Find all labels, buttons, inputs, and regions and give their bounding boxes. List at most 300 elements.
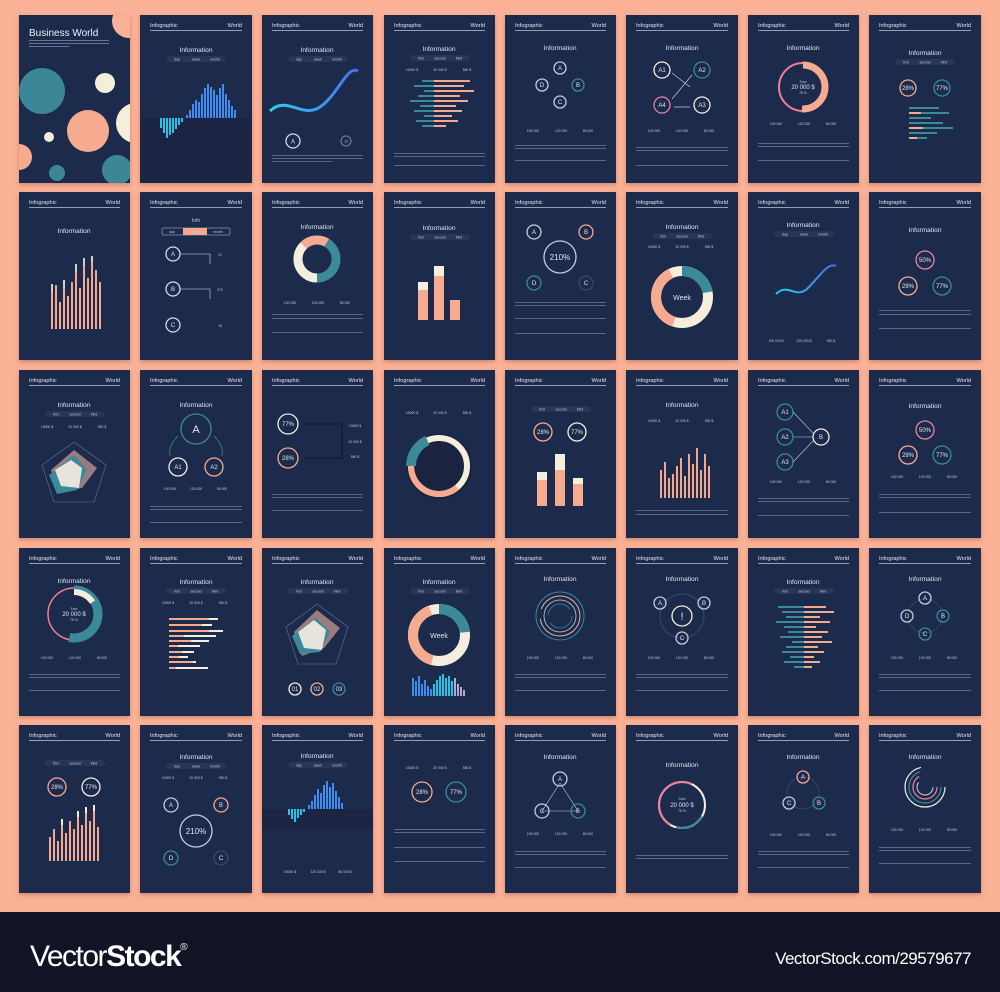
card r5c6: ring 20 000 $ [626, 725, 738, 893]
card r3c1: radar chart: World [105, 378, 120, 384]
card r4c2: horizontal pink bars: second [191, 590, 202, 594]
card r5c4: 28% 77%: 550 $ [463, 766, 471, 770]
card r2c3: cream/teal donut: 120 000 [312, 301, 324, 305]
card r3c8: 50% 28% 77%: 50% [919, 428, 932, 434]
card r1c6: A1 A2 A3 A4: A4 [658, 103, 666, 109]
card r2c6: Week donut: Infographic [636, 200, 664, 206]
card r4c8: A B C D cycle: D [905, 614, 910, 620]
card r4c6: ! with A B C: ! [680, 611, 684, 623]
card r2c5: 210% network: Infographic [515, 200, 543, 206]
card r3c1: radar chart: 550 $ [98, 425, 106, 429]
card r3c3: 77% 28% with values: 77% [282, 422, 295, 428]
card r1c8: 28% 77% with bars: third [941, 60, 947, 64]
card r1c3: wave line: month [332, 58, 342, 62]
card r4c6: ! with A B C: Information [666, 576, 699, 583]
card r2c4: three stacked bars [384, 192, 495, 360]
card r2c2: A B C timeline: C [171, 323, 176, 329]
card r4c1: donut 20 000 $: 80 000 [97, 656, 107, 660]
card r2c6: Week donut: 550 $ [705, 245, 713, 249]
card r2c6: Week donut: third [698, 234, 704, 238]
card r4c2: horizontal pink bars: 10000 $ [162, 601, 174, 605]
card r2c2: A B C timeline: week [191, 230, 199, 234]
card r4c1: donut 20 000 $: Information [58, 578, 91, 585]
card r3c1: radar chart: Information [58, 402, 91, 409]
card r1c2: bar chart positive/negative: month [210, 58, 220, 62]
card r2c7: wave line: 550 $ [827, 339, 835, 343]
card r3c2: A with A1 A2: World [227, 378, 242, 384]
card r3c2: A with A1 A2: A2 [210, 465, 218, 471]
card r2c3: cream/teal donut [262, 192, 373, 360]
card r1c2: bar chart positive/negative: Information [180, 47, 213, 54]
card r1c2: bar chart positive/negative [140, 15, 252, 183]
card r2c7: wave line: Infographic [758, 200, 786, 206]
card r1c5: A B C D nodes: 120 000 [555, 129, 567, 133]
card r2c3: cream/teal donut: 100 000 [284, 301, 296, 305]
card r5c5: triangle A B C [505, 725, 616, 893]
card r4c2: horizontal pink bars: third [212, 590, 218, 594]
card r5c4: 28% 77%: 20 000 $ [433, 766, 447, 770]
card r4c5: concentric circles: World [591, 556, 606, 562]
card r4c2: horizontal pink bars: Infographic [150, 556, 178, 562]
card r3c7: A1 A2 A3 to B: World [834, 378, 849, 384]
card r4c8: A B C D cycle: Information [908, 576, 942, 583]
card r4c4: Week donut with bars: second [435, 590, 446, 594]
card r4c5: concentric circles: Information [544, 576, 577, 583]
card r3c8: 50% 28% 77% [869, 370, 981, 538]
card r2c6: Week donut: Information [666, 224, 699, 231]
card r4c6: ! with A B C: 100 000 [648, 656, 660, 660]
card r4c6: ! with A B C: C [680, 636, 685, 642]
card r5c6: ring 20 000 $: Infographic [636, 733, 664, 739]
card r4c5: concentric circles: Infographic [515, 556, 543, 562]
card r1c5: A B C D nodes: 80 000 [583, 129, 593, 133]
card r5c6: ring 20 000 $: Sum [679, 797, 686, 801]
card r5c8: concentric rings: World [956, 733, 971, 739]
card r1c6: A1 A2 A3 A4 [626, 15, 738, 183]
card r3c2: A with A1 A2: A [192, 424, 200, 436]
card r2c2: A B C timeline: B [171, 287, 175, 293]
card r4c4: Week donut with bars: first [418, 590, 424, 594]
card r5c5: triangle A B C: 120 000 [555, 832, 567, 836]
card r2c5: 210% network: C [584, 281, 589, 287]
card r5c5: triangle A B C: C [540, 809, 545, 815]
card r3c3: 77% 28% with values: Infographic [272, 378, 300, 384]
card r4c6: ! with A B C: A [658, 601, 662, 607]
card r4c3: radar with 01 02 03: first [296, 590, 302, 594]
card r1c4: horizontal bars: World [470, 23, 485, 29]
card r4c5: concentric circles: 80 000 [583, 656, 593, 660]
card r3c4: big ring: 20 000 $ [433, 411, 447, 415]
card r1c4: horizontal bars [384, 15, 495, 183]
card r5c1: 28% 77% vertical bars: World [105, 733, 120, 739]
card r1c5: A B C D nodes: 100 000 [527, 129, 539, 133]
card r3c6: vertical bars: 550 $ [705, 419, 713, 423]
card r5c3: pos/neg bars: 120 000 $ [310, 870, 326, 874]
card r1c5: A B C D nodes: World [591, 23, 606, 29]
card r2c8: 50% 28% 77% [869, 192, 981, 360]
footer: VectorStock logo: ® [180, 942, 188, 953]
footer band [0, 912, 1000, 992]
card r5c3: pos/neg bars: month [332, 764, 342, 768]
card r1c2: bar chart positive/negative: week [192, 58, 200, 62]
card r5c7: A B C cycle: Infographic [758, 733, 786, 739]
card r1c4: horizontal bars: second [435, 56, 446, 60]
card r4c1: donut 20 000 $: 20 000 $ [62, 612, 86, 618]
card r4c8: A B C D cycle: 100 000 [891, 656, 903, 660]
card r5c8: concentric rings: Information [908, 754, 942, 761]
card r2c2: A B C timeline: day [169, 230, 175, 234]
card r4c6: ! with A B C: 80 000 [704, 656, 714, 660]
card r3c4: big ring: Infographic [394, 378, 422, 384]
card r2c7: wave line: World [834, 200, 849, 206]
card r3c1: radar chart: second [70, 412, 81, 416]
card r3c6: vertical bars: Information [666, 402, 699, 409]
card r2c4: three stacked bars: World [470, 200, 485, 206]
card r4c8: A B C D cycle: Infographic [879, 556, 907, 562]
card r2c8: 50% 28% 77%: 77% [936, 284, 949, 290]
card r5c8: concentric rings [869, 725, 981, 893]
card r1c5: A B C D nodes: A [558, 66, 562, 72]
card r3c1: radar chart: 20 000 $ [68, 425, 82, 429]
card r4c6: ! with A B C: 120 000 [676, 656, 688, 660]
card r1c8: 28% 77% with bars: 28% [902, 86, 915, 92]
card r5c2: 210% network: 10000 $ [162, 776, 174, 780]
card r3c5: 28% 77% with bars: World [591, 378, 606, 384]
card r4c3: radar with 01 02 03: third [334, 590, 340, 594]
card r5c6: ring 20 000 $: 75 % [678, 809, 686, 813]
card r5c2: 210% network: A [169, 803, 173, 809]
card r2c7: wave line: 100 000 $ [768, 339, 784, 343]
card r3c5: 28% 77% with bars: 28% [537, 430, 550, 436]
card r3c4: big ring: 10000 $ [406, 411, 418, 415]
card r1c3: wave line: 12 [344, 140, 348, 144]
card r5c5: triangle A B C: World [591, 733, 606, 739]
card r1c5: A B C D nodes: B [576, 83, 580, 89]
card r2c5: 210% network: World [591, 200, 606, 206]
card r1c8: 28% 77% with bars: 77% [936, 86, 949, 92]
card r3c7: A1 A2 A3 to B: Infographic [758, 378, 786, 384]
card r1c5: A B C D nodes: Infographic [515, 23, 543, 29]
card r2c7: wave line: week [800, 232, 808, 236]
card r4c3: radar with 01 02 03: Information [300, 579, 334, 586]
card r1c5: A B C D nodes: D [540, 83, 545, 89]
card r5c1: 28% 77% vertical bars: 77% [85, 785, 98, 791]
card r5c7: A B C cycle: Information [786, 754, 820, 761]
card r1c8: 28% 77% with bars: Information [908, 50, 942, 57]
card r3c2: A with A1 A2: A1 [174, 465, 182, 471]
card r3c7: A1 A2 A3 to B: A1 [781, 410, 789, 416]
card r2c2: A B C timeline: 12 [218, 253, 222, 257]
card r4c6: ! with A B C: World [713, 556, 728, 562]
card r4c3: radar with 01 02 03: 03 [336, 687, 343, 693]
card r3c7: A1 A2 A3 to B: A3 [781, 460, 789, 466]
card r4c4: Week donut with bars: World [470, 556, 485, 562]
card r1c6: A1 A2 A3 A4: Infographic [636, 23, 664, 29]
card r1c4: horizontal bars: 550 $ [463, 68, 471, 72]
card r1c6: A1 A2 A3 A4: World [713, 23, 728, 29]
card r1c7: pink donut: World [834, 23, 849, 29]
card r1c6: A1 A2 A3 A4: Information [666, 45, 699, 52]
card r4c8: A B C D cycle: A [923, 596, 927, 602]
card r3c7: A1 A2 A3 to B: 100 000 [770, 480, 782, 484]
card r5c3: pos/neg bars [262, 725, 373, 893]
card r2c8: 50% 28% 77%: Information [908, 227, 942, 234]
card r5c1: 28% 77% vertical bars: second [70, 762, 81, 766]
card r2c4: three stacked bars: first [418, 236, 424, 240]
card r3c6: vertical bars: 20 000 $ [675, 419, 689, 423]
card r5c4: 28% 77%: 28% [416, 790, 429, 796]
card r3c4: big ring: World [470, 378, 485, 384]
card r4c8: A B C D cycle: 80 000 [947, 656, 957, 660]
footer: VectorStock logo: VectorStock [30, 940, 180, 973]
card r3c5: 28% 77% with bars: 77% [571, 430, 584, 436]
card r1c6: A1 A2 A3 A4: 80 000 [704, 129, 714, 133]
card r5c3: pos/neg bars: 80 000 $ [338, 870, 352, 874]
card r4c2: horizontal pink bars: 550 $ [219, 601, 227, 605]
card r2c6: Week donut: first [660, 234, 666, 238]
card r2c1: vertical pink bars: World [105, 200, 120, 206]
card r5c7: A B C cycle: 100 000 [770, 833, 782, 837]
card r3c7: A1 A2 A3 to B: 120 000 [798, 480, 810, 484]
card r4c3: radar with 01 02 03 [262, 548, 373, 716]
cover title: Business World [29, 28, 98, 39]
card r5c2: 210% network: 550 $ [219, 776, 227, 780]
card r3c8: 50% 28% 77%: Information [908, 403, 942, 410]
card r3c5: 28% 77% with bars: third [577, 408, 583, 412]
card r5c7: A B C cycle: 80 000 [826, 833, 836, 837]
card r4c5: concentric circles: 120 000 [555, 656, 567, 660]
card r1c1: Business World cover [17, 15, 132, 187]
card r1c4: horizontal bars: 20 000 $ [433, 68, 447, 72]
card r3c7: A1 A2 A3 to B: 80 000 [826, 480, 836, 484]
card r5c7: A B C cycle: C [787, 801, 792, 807]
card r4c8: A B C D cycle: 120 000 [919, 656, 931, 660]
card r3c4: big ring [384, 370, 495, 538]
card r5c7: A B C cycle: B [817, 801, 821, 807]
card r4c8: A B C D cycle: C [923, 632, 928, 638]
card r4c1: donut 20 000 $: 100 000 [41, 656, 53, 660]
card r2c1: vertical pink bars [19, 192, 130, 360]
card r1c8: 28% 77% with bars: first [903, 60, 909, 64]
card r1c8: 28% 77% with bars: World [956, 23, 971, 29]
card r2c5: 210% network: A [532, 230, 536, 236]
card r4c2: horizontal pink bars: first [174, 590, 180, 594]
card r1c7: pink donut: Sum [800, 80, 807, 84]
card r5c2: 210% network: B [219, 803, 223, 809]
card r4c8: A B C D cycle: B [941, 614, 945, 620]
card r1c8: 28% 77% with bars: Infographic [879, 23, 907, 29]
card r3c5: 28% 77% with bars: first [539, 408, 545, 412]
card r4c2: horizontal pink bars: World [227, 556, 242, 562]
card r5c2: 210% network: D [169, 856, 174, 862]
card r4c5: concentric circles [505, 548, 616, 716]
card r3c5: 28% 77% with bars: Infographic [515, 378, 543, 384]
card r5c2: 210% network: 210% [186, 827, 206, 836]
card r5c4: 28% 77%: World [470, 733, 485, 739]
card r2c6: Week donut: second [677, 234, 688, 238]
card r5c4: 28% 77%: Infographic [394, 733, 422, 739]
card r3c5: 28% 77% with bars [505, 370, 616, 538]
card r2c7: wave line: Information [786, 222, 820, 229]
card r1c7: pink donut [748, 15, 859, 183]
card r2c7: wave line: day [782, 232, 788, 236]
card r3c2: A with A1 A2 [140, 370, 252, 538]
card r2c6: Week donut: World [713, 200, 728, 206]
card r5c5: triangle A B C: 100 000 [527, 832, 539, 836]
card r3c8: 50% 28% 77%: World [956, 378, 971, 384]
card r4c7: horizontal bars blue/pink: World [834, 556, 849, 562]
card r4c1: donut 20 000 $: 75 % [70, 618, 78, 622]
card r3c4: big ring: 550 $ [463, 411, 471, 415]
card r4c4: Week donut with bars: Information [422, 579, 456, 586]
card r5c5: triangle A B C: Infographic [515, 733, 543, 739]
card r1c4: horizontal bars: first [418, 56, 424, 60]
card r4c7: horizontal bars blue/pink: second [799, 590, 810, 594]
card r5c2: 210% network: C [219, 856, 224, 862]
card r2c6: Week donut: 10000 $ [648, 245, 660, 249]
card r3c8: 50% 28% 77%: 100 000 [891, 475, 903, 479]
card r4c6: ! with A B C: B [702, 601, 706, 607]
card r3c7: A1 A2 A3 to B: B [819, 435, 823, 441]
card r1c7: pink donut: 80 000 [826, 122, 836, 126]
card r5c4: 28% 77% [384, 725, 495, 893]
card r3c1: radar chart: third [91, 412, 97, 416]
card r1c5: A B C D nodes [505, 15, 616, 183]
card r5c4: 28% 77%: 77% [450, 790, 463, 796]
footer: url: VectorStock.com/29579677 [775, 949, 971, 968]
card r1c4: horizontal bars: Infographic [394, 23, 422, 29]
card r3c2: A with A1 A2: 100 000 [164, 487, 176, 491]
card r2c3: cream/teal donut: Infographic [272, 200, 300, 206]
card r5c5: triangle A B C: Information [544, 754, 577, 761]
card r4c5: concentric circles: 100 000 [527, 656, 539, 660]
card r1c6: A1 A2 A3 A4: A2 [698, 68, 706, 74]
card r2c2: A B C timeline: 272 [217, 288, 223, 292]
card r5c8: concentric rings: 80 000 [947, 828, 957, 832]
card r2c3: cream/teal donut: World [348, 200, 363, 206]
card r5c7: A B C cycle: World [834, 733, 849, 739]
card r3c6: vertical bars [626, 370, 738, 538]
card r1c3: wave line: Information [300, 47, 334, 54]
card r3c2: A with A1 A2: Information [180, 402, 213, 409]
card r1c3: wave line: World [348, 23, 363, 29]
card r2c8: 50% 28% 77%: 50% [919, 258, 932, 264]
card r3c6: vertical bars: Infographic [636, 378, 664, 384]
card r4c3: radar with 01 02 03: 01 [292, 687, 299, 693]
card r2c5: 210% network [505, 192, 616, 360]
card r5c6: ring 20 000 $: 20 000 $ [670, 803, 694, 809]
card r1c8: 28% 77% with bars: second [920, 60, 931, 64]
card r5c7: A B C cycle: 120 000 [798, 833, 810, 837]
card r3c8: 50% 28% 77%: 120 000 [919, 475, 931, 479]
card r1c6: A1 A2 A3 A4: A1 [658, 68, 666, 74]
card r2c2: A B C timeline: Info [192, 218, 200, 224]
card r4c8: A B C D cycle: World [956, 556, 971, 562]
card r5c8: concentric rings: Infographic [879, 733, 907, 739]
card r3c2: A with A1 A2: 80 000 [217, 487, 227, 491]
card r2c8: 50% 28% 77%: Infographic [879, 200, 907, 206]
card r1c7: pink donut: 20 000 $ [791, 85, 815, 91]
card r5c1: 28% 77% vertical bars: third [91, 762, 97, 766]
card r5c2: 210% network: month [210, 764, 220, 768]
card r2c2: A B C timeline: month [213, 230, 223, 234]
card r5c1: 28% 77% vertical bars: first [53, 762, 59, 766]
card r3c3: 77% 28% with values: World [348, 378, 363, 384]
card r2c7: wave line [748, 192, 859, 360]
card r4c1: donut 20 000 $: Sum [71, 607, 78, 611]
card r1c5: A B C D nodes: Information [544, 45, 577, 52]
card r2c4: three stacked bars: third [456, 236, 462, 240]
card r1c6: A1 A2 A3 A4: 100 000 [648, 129, 660, 133]
card r3c5: 28% 77% with bars: second [556, 408, 567, 412]
card r4c1: donut 20 000 $: Infographic [29, 556, 57, 562]
card r1c3: wave line: day [296, 58, 302, 62]
card r5c2: 210% network: Information [180, 754, 213, 761]
card r2c1: vertical pink bars: Information [58, 228, 91, 235]
card r5c2: 210% network: day [174, 764, 180, 768]
card r3c8: 50% 28% 77%: Infographic [879, 378, 907, 384]
card r1c7: pink donut: 75 % [799, 91, 807, 95]
card r3c3: 77% 28% with values: 20 000 $ [348, 440, 362, 444]
card r2c6: Week donut: Week [673, 295, 691, 302]
card r4c7: horizontal bars blue/pink [748, 548, 859, 716]
card r4c2: horizontal pink bars: 20 000 $ [189, 601, 203, 605]
card r5c4: 28% 77%: 10000 $ [406, 766, 418, 770]
card r4c4: Week donut with bars [384, 548, 495, 716]
card r4c1: donut 20 000 $: World [105, 556, 120, 562]
card r2c5: 210% network: 210% [550, 253, 570, 262]
card r5c3: pos/neg bars: World [348, 733, 363, 739]
card r4c2: horizontal pink bars: Information [180, 579, 213, 586]
card r1c4: horizontal bars: Information [422, 46, 456, 53]
card r3c6: vertical bars: World [713, 378, 728, 384]
card r4c4: Week donut with bars: third [456, 590, 462, 594]
card r5c2: 210% network: week [192, 764, 200, 768]
card r3c8: 50% 28% 77%: 28% [902, 453, 915, 459]
card r5c1: 28% 77% vertical bars [19, 725, 130, 893]
card r1c3: wave line [262, 15, 373, 183]
card r5c2: 210% network: World [227, 733, 242, 739]
card r5c2: 210% network: 20 000 $ [189, 776, 203, 780]
card r4c7: horizontal bars blue/pink: Information [786, 579, 820, 586]
card r4c6: ! with A B C [626, 548, 738, 716]
card r4c3: radar with 01 02 03: 02 [314, 687, 321, 693]
card r2c2: A B C timeline: 15 [218, 324, 222, 328]
card r3c8: 50% 28% 77%: 80 000 [947, 475, 957, 479]
card r5c3: pos/neg bars: 10000 $ [284, 870, 296, 874]
card r5c2: 210% network [140, 725, 252, 893]
card r2c2: A B C timeline: A [171, 252, 175, 258]
card r3c8: 50% 28% 77%: 77% [936, 453, 949, 459]
card r4c3: radar with 01 02 03: second [313, 590, 324, 594]
card r5c3: pos/neg bars: Information [300, 753, 334, 760]
card r1c3: wave line: Infographic [272, 23, 300, 29]
card r2c5: 210% network: D [532, 281, 537, 287]
card r2c8: 50% 28% 77%: 28% [902, 284, 915, 290]
card r5c2: 210% network: Infographic [150, 733, 178, 739]
card r1c4: horizontal bars: 10000 $ [406, 68, 418, 72]
card r5c3: pos/neg bars: week [314, 764, 322, 768]
card r3c3: 77% 28% with values: 550 $ [351, 455, 359, 459]
card r5c3: pos/neg bars: day [296, 764, 302, 768]
card r2c7: wave line: month [818, 232, 828, 236]
card r2c8: 50% 28% 77%: World [956, 200, 971, 206]
card r3c1: radar chart: Infographic [29, 378, 57, 384]
card r1c8: 28% 77% with bars [869, 15, 981, 183]
card r4c7: horizontal bars blue/pink: Infographic [758, 556, 786, 562]
card r5c1: 28% 77% vertical bars: Infographic [29, 733, 57, 739]
card r2c2: A B C timeline: World [227, 200, 242, 206]
